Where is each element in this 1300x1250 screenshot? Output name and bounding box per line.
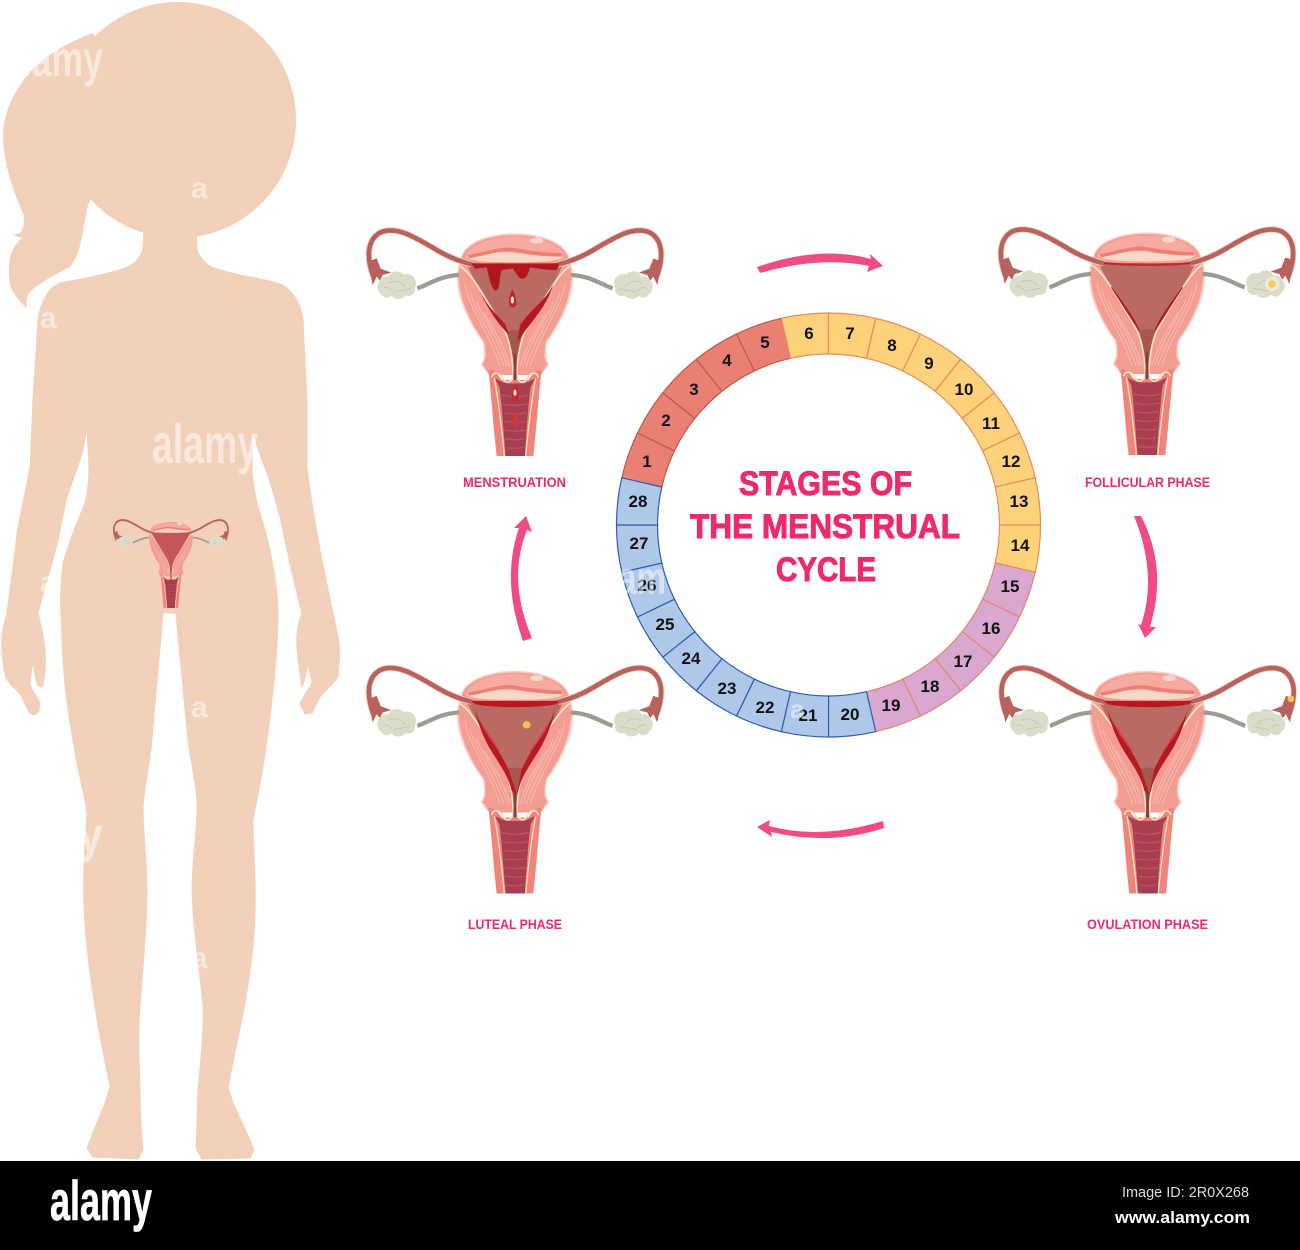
day numbers: 3 — [689, 380, 699, 399]
title — [690, 465, 960, 589]
website: www.alamy.com — [1114, 1208, 1250, 1227]
ring watermark: am — [618, 552, 666, 604]
watermarks on body: alamy — [152, 412, 258, 475]
day numbers: 10 — [955, 380, 973, 399]
watermarks on body — [2, 31, 258, 975]
day numbers: 13 — [1010, 492, 1028, 511]
uterus: menstruation — [368, 230, 662, 456]
day numbers: 8 — [887, 336, 897, 355]
day numbers: 20 — [841, 705, 859, 724]
body silhouette — [2, 2, 340, 1159]
label: luteal phase: LUTEAL PHASE — [468, 917, 562, 932]
footer bar — [0, 1161, 1300, 1250]
watermarks on body: y — [78, 807, 103, 863]
day numbers: 1 — [642, 452, 652, 471]
day numbers: 23 — [718, 679, 736, 698]
day numbers: 16 — [982, 619, 1000, 638]
day numbers: 22 — [756, 698, 774, 717]
label: ovulation phase: OVULATION PHASE — [1087, 917, 1208, 932]
title: CYCLE — [776, 551, 876, 589]
day numbers: 12 — [1002, 452, 1020, 471]
day numbers: 11 — [982, 414, 1000, 433]
arrow: top — [757, 254, 883, 273]
menstrual blood — [472, 263, 559, 427]
day numbers: 5 — [760, 333, 770, 352]
uterus: luteal phase — [368, 668, 662, 893]
day numbers: 17 — [954, 652, 972, 671]
day numbers: 18 — [921, 677, 939, 696]
segments — [611, 308, 1046, 742]
day numbers: 15 — [1001, 577, 1019, 596]
day numbers: 7 — [845, 324, 855, 343]
footer logo: alamy — [50, 1169, 152, 1232]
label: follicular phase: FOLLICULAR PHASE — [1085, 475, 1210, 490]
day numbers: 14 — [1011, 536, 1030, 555]
egg — [1288, 695, 1294, 702]
day numbers — [629, 324, 1030, 725]
title: THE MENSTRUAL — [690, 508, 960, 546]
head — [60, 2, 296, 238]
watermarks on body: a — [191, 172, 208, 205]
day numbers: 21 — [799, 706, 817, 725]
image id: Image ID: 2R0X268 — [1122, 1184, 1249, 1201]
ring watermark — [618, 552, 805, 724]
day numbers: 4 — [722, 351, 732, 370]
watermarks on body: a — [191, 691, 208, 724]
arrow: left — [511, 516, 532, 641]
day numbers: 26 — [638, 576, 656, 595]
hair — [3, 33, 130, 308]
follicle — [1265, 277, 1279, 291]
day numbers: 24 — [682, 649, 701, 668]
uterus: follicular phase — [1000, 229, 1294, 455]
watermarks on body: a — [40, 566, 57, 599]
day numbers: 28 — [629, 492, 647, 511]
day numbers: 19 — [882, 696, 900, 715]
watermarks on body: a — [191, 942, 208, 975]
watermarks on body: a — [40, 302, 57, 335]
egg — [523, 721, 531, 728]
cycle ring — [611, 308, 1046, 742]
ring watermark: a — [790, 694, 805, 724]
uterus: ovulation phase — [1001, 668, 1295, 893]
title: STAGES OF — [739, 465, 912, 503]
arrow: bottom — [757, 820, 884, 838]
day numbers: 2 — [661, 411, 671, 430]
torso, arms and legs — [2, 232, 340, 1159]
day numbers: 9 — [924, 354, 934, 373]
small uterus on body — [114, 520, 228, 608]
arrow: right — [1134, 516, 1157, 638]
day numbers: 27 — [630, 534, 648, 553]
watermarks on body: alamy — [2, 31, 103, 87]
day numbers: 25 — [656, 615, 674, 634]
day numbers: 6 — [804, 324, 814, 343]
label: menstruation: MENSTRUATION — [463, 475, 566, 490]
